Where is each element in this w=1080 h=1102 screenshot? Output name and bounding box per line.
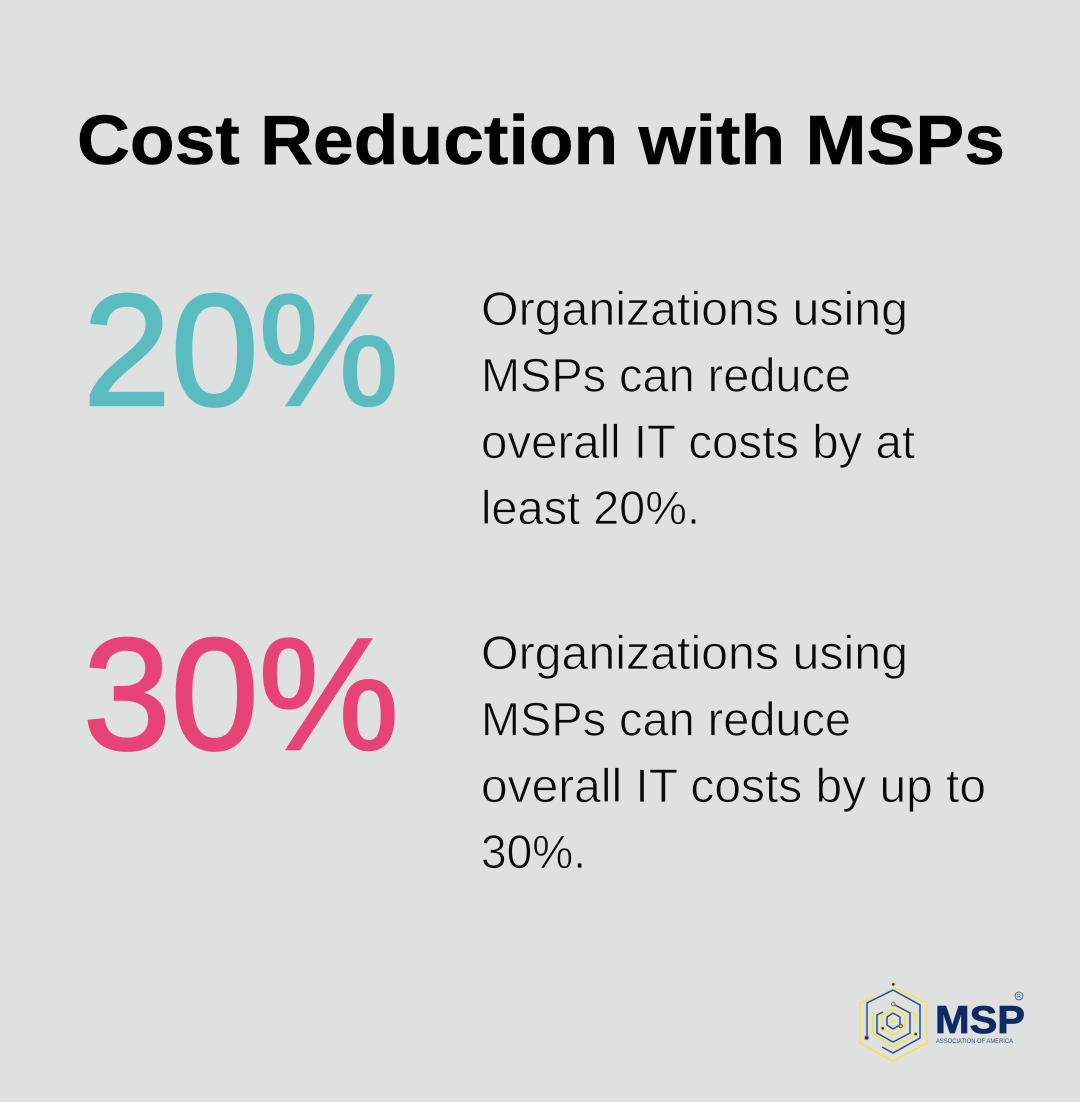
title: Cost Reduction with MSPs [77,101,1005,179]
icon: nested circuit hexagons [860,982,927,1061]
description: up to 30%: MSPs can reduce [481,692,851,746]
description: up to 30%: Organizations using [481,626,908,679]
description: at least 20% [481,282,915,534]
logo wordmark: MSP [935,999,1025,1042]
description: at least 20%: overall IT costs by at [481,415,915,468]
description: up to 30%: 30%. [481,825,586,878]
stat number: 20%: 20% [83,261,399,439]
description: at least 20%: Organizations using [481,282,908,335]
logo registered mark: R [1017,994,1021,1000]
description: at least 20%: MSPs can reduce [481,348,851,402]
logo registered mark [1015,992,1023,1000]
logo: MSP Association of America [860,982,1025,1061]
logo tagline: ASSOCIATION OF AMERICA [936,1038,1014,1045]
description: at least 20%: least 20%. [481,481,700,534]
stat row: 20% [83,261,915,534]
stat number: 30%: 30% [83,605,399,783]
description: up to 30%: overall IT costs by up to [481,759,986,812]
circuit nodes [865,982,918,1040]
description: up to 30% [481,626,986,878]
stat row: 30% [83,605,986,878]
